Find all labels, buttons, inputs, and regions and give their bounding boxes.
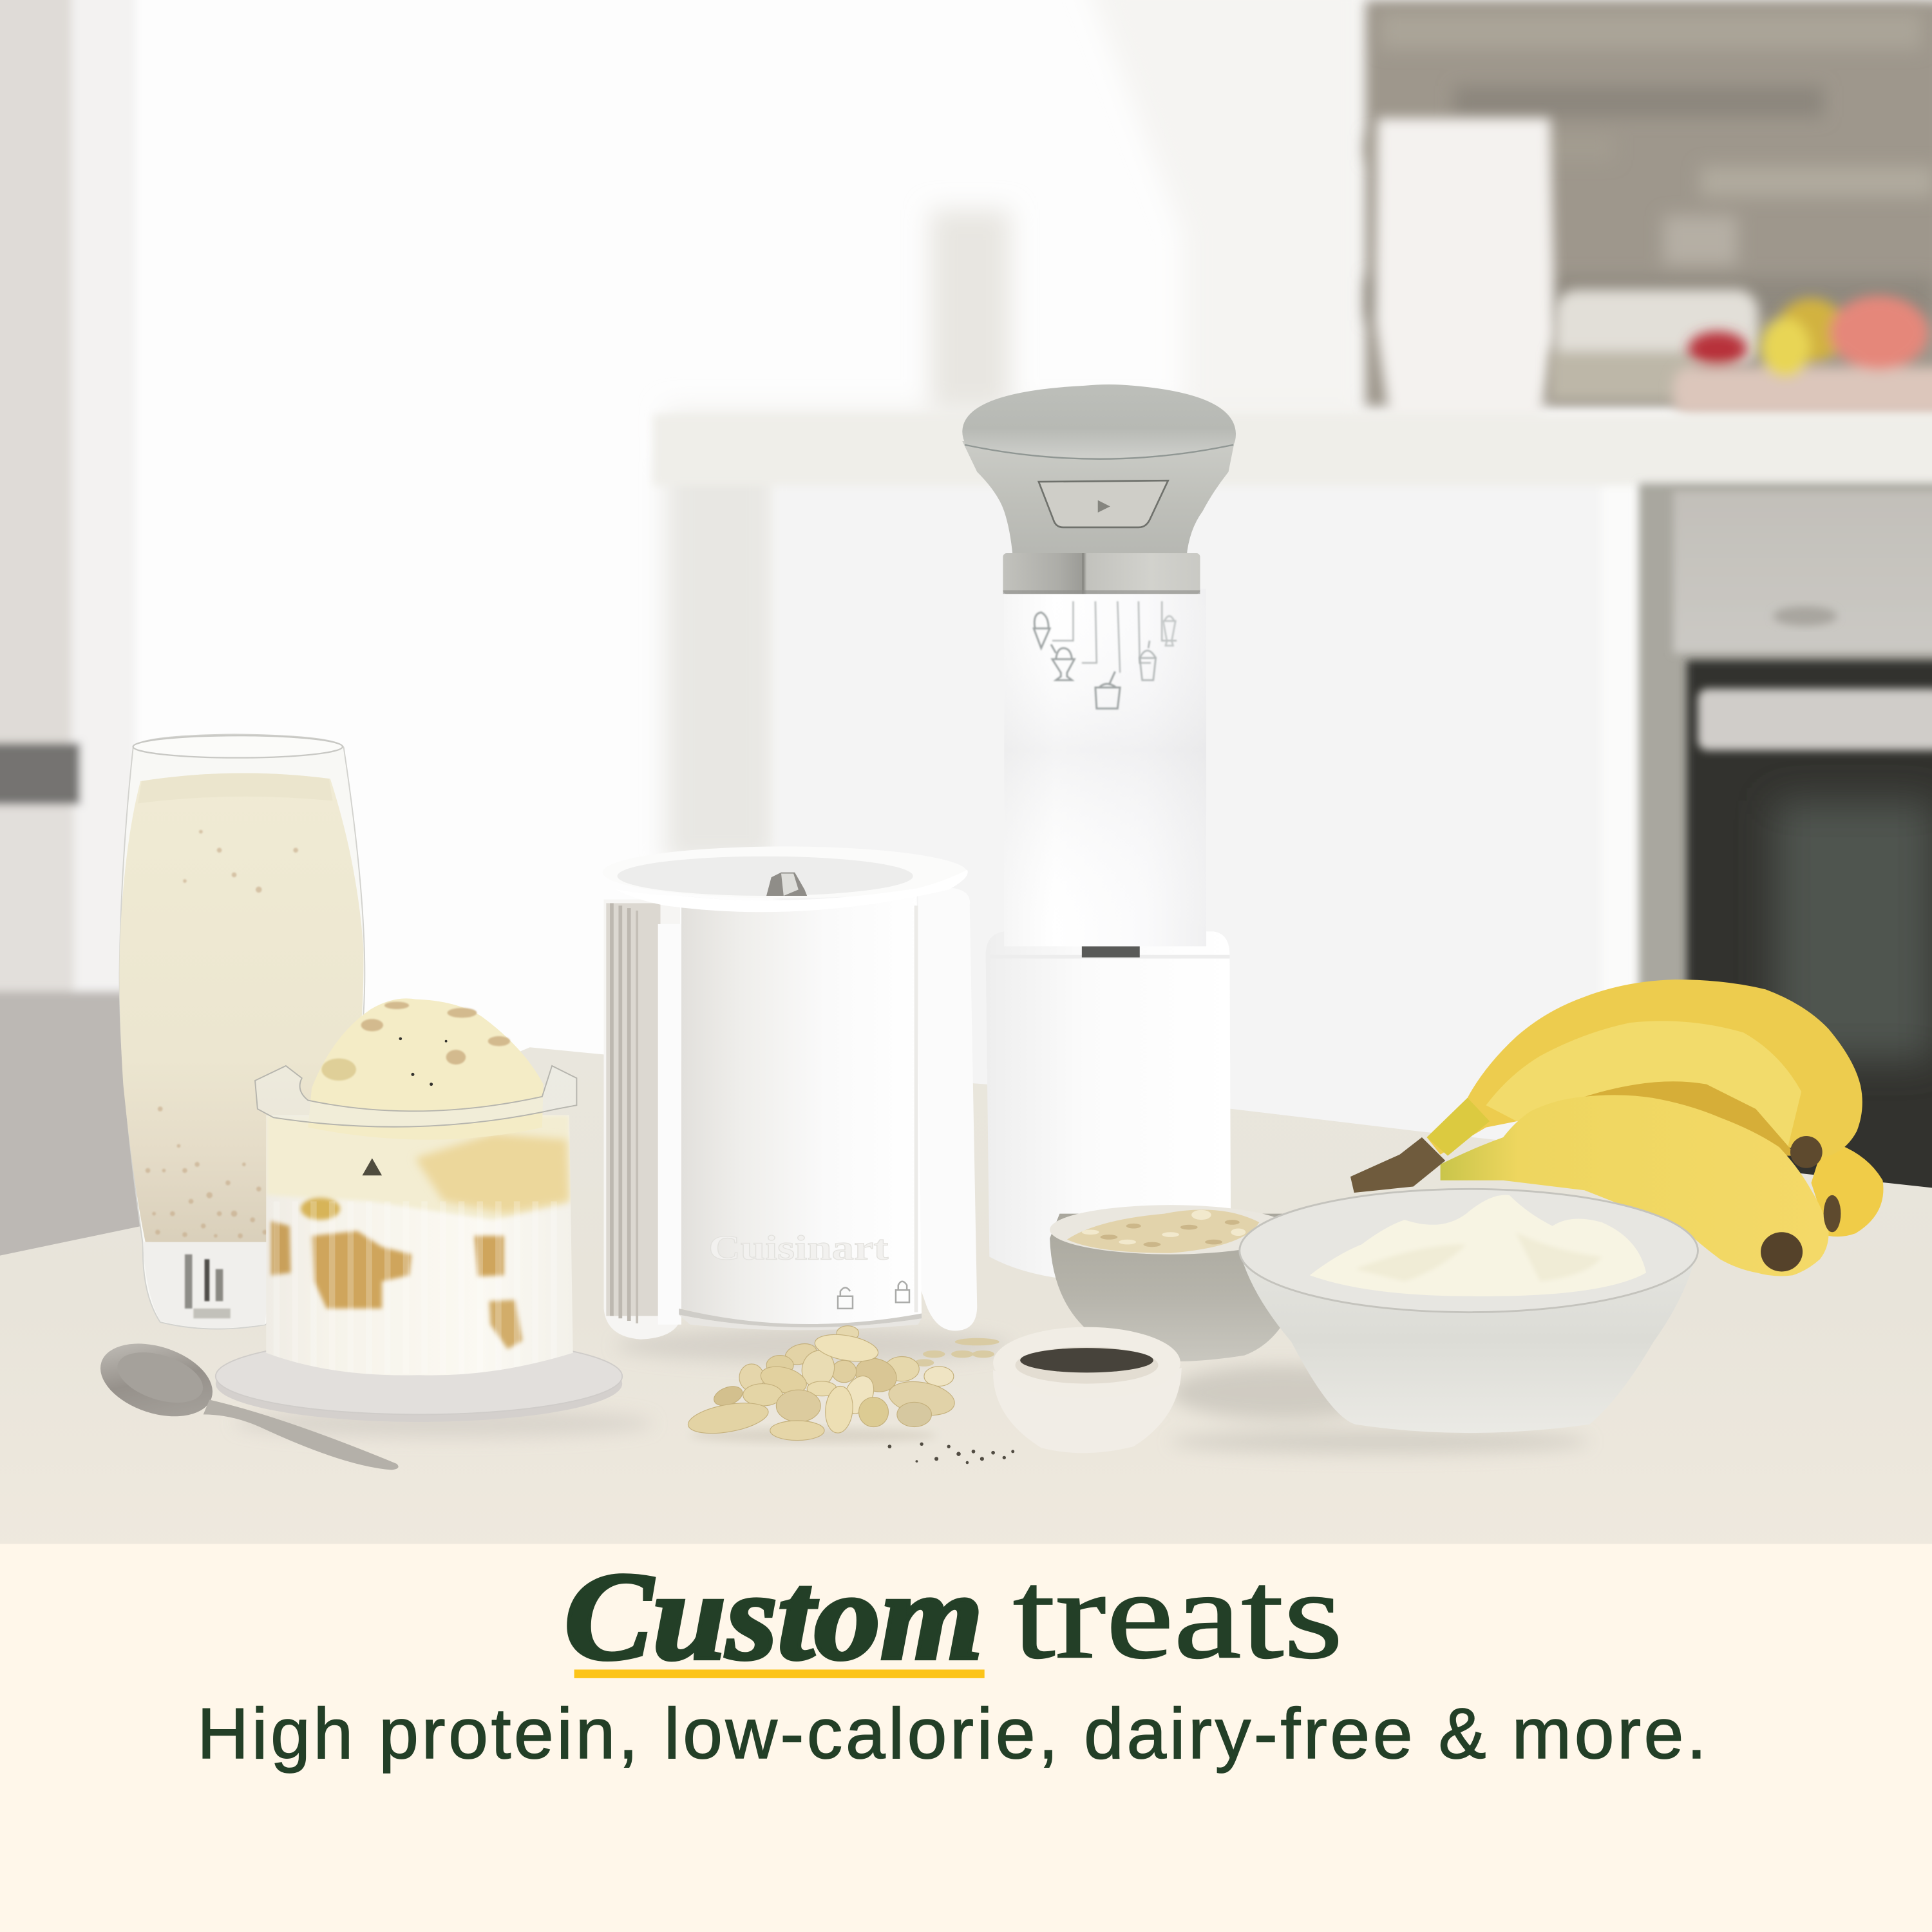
icon: mix-in cup (1095, 672, 1120, 708)
left ribs (606, 903, 681, 1325)
shake (119, 773, 363, 1247)
grey cap (962, 384, 1236, 458)
peanuts pile (686, 1326, 999, 1443)
yogurt bowl (1240, 1189, 1698, 1433)
back banana (1811, 1140, 1883, 1236)
upper shadow shapes (665, 0, 1528, 862)
caption panel (0, 1544, 1932, 1932)
oats bowl (1050, 1205, 1306, 1361)
icon: play triangle (1098, 500, 1110, 513)
lid disc (216, 1338, 622, 1422)
icon: sundae dish (1051, 645, 1074, 680)
icon: milkshake glass (1163, 616, 1175, 646)
icon: unlock (838, 1287, 853, 1309)
upper backsplash (1365, 0, 1932, 406)
pint body (266, 1115, 573, 1376)
speckles (146, 830, 298, 1238)
scattered oats (914, 1338, 999, 1367)
top banana (1427, 980, 1862, 1157)
upper ice cream band (266, 1115, 569, 1220)
vase (1375, 118, 1555, 421)
left wall strip (0, 0, 135, 1010)
title underline (574, 1669, 985, 1678)
icon: smoothie cup (1140, 641, 1156, 680)
right side rail (918, 887, 977, 1331)
rim (603, 846, 967, 898)
glass base (143, 1242, 274, 1328)
brand name: Cuisinart (708, 1228, 889, 1267)
grey neck (962, 441, 1235, 557)
front banana (1441, 1095, 1828, 1276)
yogurt (1310, 1195, 1646, 1296)
oven (1639, 483, 1932, 1210)
blade (766, 873, 807, 896)
subtitle: High protein, low-calorie, dairy-free & more. (197, 1694, 1707, 1774)
machine head (962, 384, 1236, 594)
chia seeds scatter (888, 1443, 1014, 1464)
caramel swirls (271, 1198, 522, 1349)
title: Custom (564, 1547, 983, 1686)
chia seeds (1020, 1348, 1153, 1372)
glass rim (133, 735, 343, 758)
bananas (1350, 980, 1883, 1276)
glass of milkshake (119, 734, 365, 1329)
cabinet fronts (776, 466, 1645, 1156)
banana tips (1761, 1136, 1841, 1271)
blender container (603, 846, 977, 1340)
outer shell (604, 900, 680, 1340)
back counter ledge (653, 414, 1932, 486)
icon: ice cream cone (1034, 612, 1050, 648)
title: treats (1013, 1544, 1343, 1685)
spoon (91, 1331, 399, 1470)
ice cream pint on lid (216, 998, 622, 1422)
stem (1350, 1137, 1445, 1193)
pint rim (255, 1066, 576, 1127)
main cup body (681, 888, 922, 1325)
icon: triangle marker (362, 1158, 382, 1175)
ribs (273, 1202, 557, 1347)
grey collar (1003, 553, 1200, 594)
blurred fruit plate (1673, 296, 1932, 417)
icon: lock (896, 1282, 909, 1302)
counter top (0, 1047, 1932, 1553)
oats (1067, 1209, 1259, 1253)
blurred bowl (1550, 290, 1758, 401)
icon: treat selector lines (1052, 601, 1177, 673)
chia bowl (993, 1327, 1182, 1453)
ice cream scoop (308, 998, 544, 1140)
floor (0, 992, 234, 1275)
foam top (138, 773, 333, 803)
start button (1039, 480, 1168, 527)
counter shadows (234, 1328, 1589, 1454)
base ring (679, 1309, 922, 1327)
machine white body (1004, 589, 1206, 946)
lower white mixing tower base (986, 931, 1231, 1282)
title (564, 1544, 1343, 1686)
